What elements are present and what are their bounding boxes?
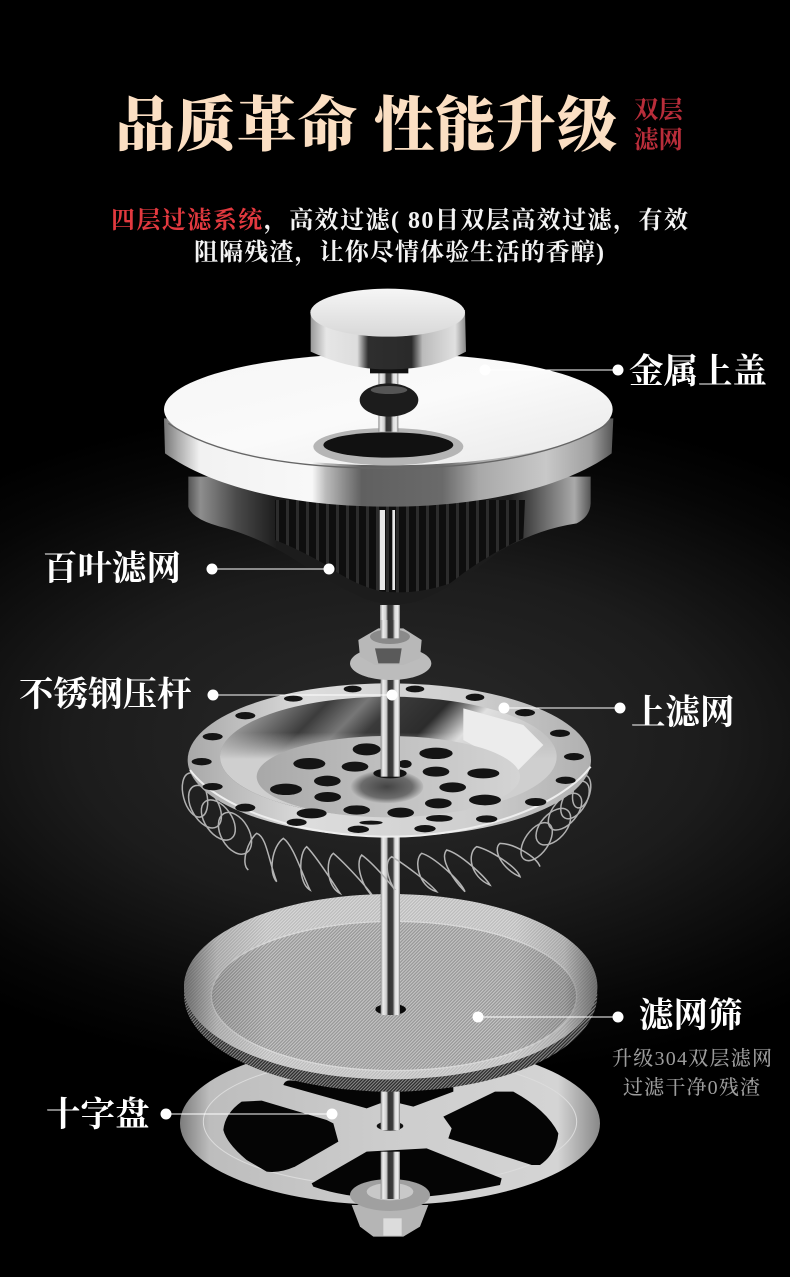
- lid top: [164, 353, 613, 465]
- leader line: cross plate: [160, 1108, 338, 1120]
- rod below disc: [381, 833, 400, 902]
- subtitle: 四层过滤系统，高效过滤( 80目双层高效过滤，有效: [111, 206, 688, 234]
- mesh centre hole: [375, 1004, 406, 1015]
- part: metal lid with knob and louvered filter: [164, 289, 613, 632]
- part: cross plate, mesh screen and bottom nut: [180, 890, 600, 1237]
- mesh underside: [184, 898, 597, 1092]
- rubber seal: [360, 383, 418, 417]
- label: mesh screen: 滤网筛: [639, 997, 742, 1035]
- rod lower segments: [381, 1152, 400, 1199]
- label: cross plate: [46, 1096, 338, 1134]
- rod top: [381, 620, 400, 687]
- flange nut: [350, 647, 431, 680]
- leader line: metal lid: [480, 364, 624, 376]
- label: stainless rod: 不锈钢压杆: [19, 676, 192, 714]
- side tag: double-layer filter: [634, 96, 684, 154]
- lid rim: [164, 418, 613, 507]
- label: louvered filter: [43, 550, 334, 588]
- label: cross plate: 十字盘: [46, 1096, 150, 1134]
- label: upper filter: [498, 694, 734, 732]
- mesh rim: [184, 894, 597, 1079]
- hub: [350, 770, 423, 803]
- caption: mesh upgrade note: 升级304双层滤网: [612, 1047, 772, 1070]
- filter plate: [257, 736, 520, 817]
- spring helix: [245, 833, 540, 897]
- lid opening: [313, 428, 463, 465]
- rod section: [380, 605, 400, 632]
- cross plate cut-outs: [223, 1080, 558, 1198]
- rod highlight in louver: [380, 510, 395, 590]
- caption: mesh upgrade note: 过滤干净0残渣: [623, 1076, 760, 1099]
- cross plate: [180, 1042, 600, 1205]
- label: stainless rod: [19, 676, 398, 714]
- louvered filter: [275, 500, 525, 592]
- label: metal lid: [480, 353, 767, 391]
- mesh centre: [211, 921, 577, 1071]
- spring end coils: [178, 770, 595, 866]
- leader line: mesh screen: [472, 1012, 624, 1022]
- mesh edge shading: [184, 894, 597, 1079]
- side tag: double-layer filter: 双层: [634, 96, 684, 124]
- label: mesh screen: [472, 997, 742, 1035]
- title: 品质革命 性能升级: [115, 93, 617, 159]
- part: rod, nut, upper filter and spring: [178, 620, 595, 902]
- rod over disc: [381, 682, 400, 777]
- lid underside body: [188, 477, 591, 604]
- label: louvered filter: 百叶滤网: [43, 550, 181, 588]
- knob stem: [378, 370, 398, 432]
- caption: mesh upgrade note: [612, 1047, 772, 1099]
- leader line: louvered filter: [206, 564, 334, 574]
- bottom nut lower: [352, 1205, 428, 1237]
- side tag: double-layer filter: 滤网: [634, 126, 683, 154]
- filter disc well: [220, 697, 557, 817]
- subtitle: 阻隔残渣，让你尽情体验生活的香醇): [194, 238, 604, 266]
- knob: [370, 365, 408, 373]
- leader line: stainless rod: [208, 690, 398, 700]
- subtitle: [111, 206, 688, 266]
- filter disc outer: [188, 683, 591, 837]
- label: upper filter: 上滤网: [631, 694, 734, 732]
- bottom flange: [350, 1179, 430, 1211]
- label: metal lid: 金属上盖: [629, 353, 767, 391]
- leader line: upper filter: [498, 702, 626, 714]
- plate holes and rim holes: [192, 686, 584, 833]
- well highlight: [463, 708, 543, 770]
